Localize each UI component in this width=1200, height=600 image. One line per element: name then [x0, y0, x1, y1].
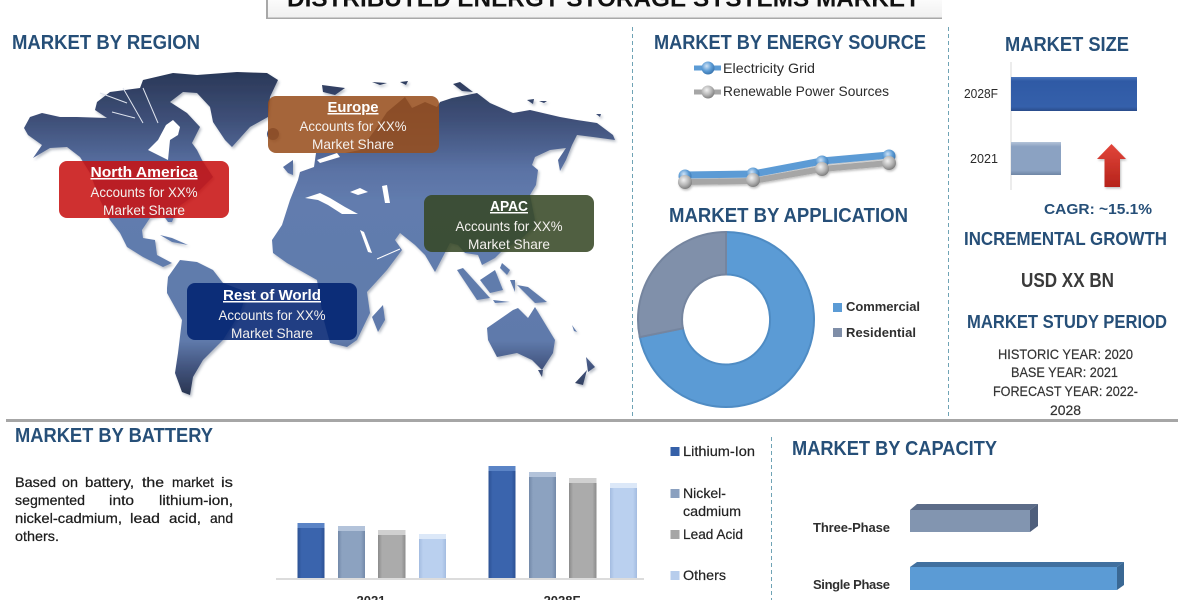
callout: apac: Accounts for XX%: [456, 218, 562, 234]
callout: rest of world: Market Share: [231, 325, 313, 341]
legend: battery: Others: [683, 567, 726, 583]
callout: europe: [268, 96, 439, 153]
battery description text: and: [210, 510, 233, 526]
battery description text: nickel-cadmium,: [15, 510, 122, 526]
callout: europe: Market Share: [312, 136, 394, 152]
heading: market by region: MARKET BY REGION: [12, 32, 200, 54]
bar chart: battery: [276, 466, 644, 600]
legend: application: Residential: [846, 325, 916, 340]
battery description text: segmented: [15, 492, 85, 508]
legend: application: Commercial: [846, 299, 920, 314]
bar chart: market size: 2021: [970, 152, 998, 166]
heading: market by energy source: MARKET BY ENERGY SOURCE: [654, 32, 926, 54]
callout: north america: North America: [90, 164, 198, 181]
heading: market by battery: MARKET BY BATTERY: [15, 425, 214, 447]
battery description text: [15, 474, 233, 544]
legend: battery: Lead Acid: [683, 526, 743, 542]
battery description text: the: [142, 474, 164, 490]
3d bar chart: capacity: [813, 504, 1124, 592]
callout: north america: Accounts for XX%: [90, 184, 198, 200]
heading: market by application: MARKET BY APPLICATION: [669, 205, 908, 227]
legend: energy source: [694, 60, 889, 99]
battery description text: lithium-ion,: [159, 492, 233, 508]
callout: apac: APAC: [490, 198, 528, 215]
title banner: [266, 0, 942, 19]
battery description text: acid,: [169, 510, 201, 526]
callout: europe: Europe: [328, 99, 378, 116]
legend: battery: cadmium: [683, 503, 741, 519]
cagr value: CAGR: ~15.1%: [1044, 201, 1152, 218]
battery description text: is: [221, 474, 233, 490]
icon: red growth arrow: [1097, 144, 1126, 187]
donut chart: application: [638, 232, 814, 407]
callout: europe: Accounts for XX%: [300, 118, 406, 134]
study period details: FORECAST YEAR: 2022-: [993, 383, 1138, 399]
legend: battery: Lithium-Ion: [683, 443, 755, 459]
heading: market by capacity: MARKET BY CAPACITY: [792, 438, 998, 460]
study period details: BASE YEAR: 2021: [1011, 364, 1118, 380]
world map: [24, 72, 615, 395]
legend: energy source: Renewable Power Sources: [723, 83, 889, 99]
legend: energy source: Electricity Grid: [723, 60, 815, 76]
heading: market size: MARKET SIZE: [1005, 34, 1129, 56]
battery description text: others.: [15, 528, 59, 544]
battery description text: market: [172, 474, 214, 490]
battery description text: battery,: [85, 474, 134, 490]
3d bar chart: capacity: Single Phase: [813, 577, 890, 592]
bar chart: market size: [964, 62, 1137, 190]
callout: rest of world: Rest of World: [223, 287, 321, 304]
bar chart: market size: 2028F: [964, 87, 998, 101]
callout: north america: Market Share: [103, 202, 185, 218]
legend: battery: [670, 443, 755, 583]
battery description text: on: [62, 474, 78, 490]
3d bar chart: capacity: Three-Phase: [813, 520, 890, 535]
study period details: [993, 346, 1138, 418]
callout: north america: [59, 161, 229, 218]
callout: apac: Market Share: [468, 236, 550, 252]
battery description text: Based: [15, 474, 56, 490]
heading: market study period: MARKET STUDY PERIOD: [967, 312, 1167, 332]
callout: rest of world: [187, 283, 357, 341]
callout: rest of world: Accounts for XX%: [218, 307, 326, 323]
callout: apac: [424, 195, 594, 252]
study period details: HISTORIC YEAR: 2020: [998, 346, 1133, 362]
battery description text: lead: [130, 510, 160, 526]
battery description text: into: [109, 492, 134, 508]
incremental growth value: USD XX BN: [1021, 270, 1114, 292]
legend: application: [833, 299, 920, 340]
line chart: energy source: [678, 150, 896, 189]
legend: battery: Nickel-: [683, 485, 726, 501]
heading: incremental growth: INCREMENTAL GROWTH: [964, 229, 1167, 249]
study period details: 2028: [1050, 402, 1081, 418]
